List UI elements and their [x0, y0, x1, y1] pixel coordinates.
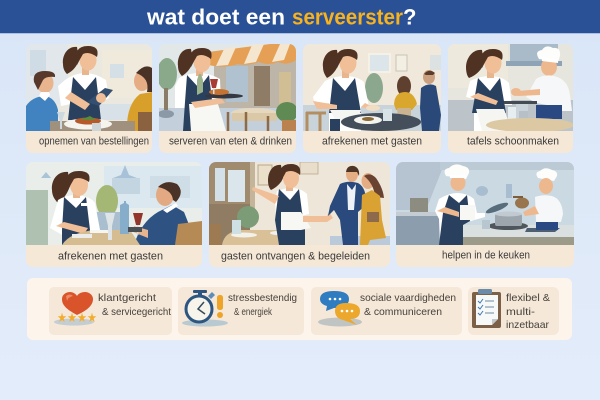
waitress: [50, 171, 100, 246]
label: afrekenen met gasten: [58, 250, 163, 262]
chair: [175, 221, 202, 245]
chef: [523, 168, 563, 230]
seated guest left: [38, 76, 54, 92]
teapot: [515, 198, 529, 208]
panel: serveren van eten & drinken: [157, 44, 298, 153]
counter: [457, 225, 574, 237]
stars: ★★★★: [57, 310, 97, 325]
chip text: sociale vaardigheden: [360, 292, 456, 304]
table: [62, 230, 140, 245]
tree left: [157, 58, 177, 90]
label: helpen in de keuken: [442, 250, 530, 262]
panel: afrekenen met gasten (top): [303, 44, 441, 153]
chip: stressbestendig: & energiek: [234, 306, 273, 318]
chip: flexibel: [468, 287, 559, 335]
label: afrekenen met gasten: [322, 136, 422, 148]
chip text: flexibel &: [506, 292, 550, 304]
pot on stove: [488, 222, 528, 230]
table with cloth: [222, 230, 279, 245]
panel: helpen in de keuken: [396, 162, 574, 267]
label: tafels schoonmaken: [467, 136, 559, 148]
label: serveren van eten & drinken: [169, 136, 292, 148]
waitress: [175, 48, 226, 131]
icon: clipboard checklist: [472, 289, 501, 328]
round table with plate and glass: [341, 113, 421, 131]
chip: stressbestendig: [178, 287, 304, 335]
label: gasten ontvangen & begeleiden: [221, 250, 370, 262]
icon: speech bubbles: [318, 291, 362, 326]
chip text: stressbestendig: [228, 292, 297, 304]
illustration: kitchen: [396, 162, 574, 245]
tools and glasses: [504, 101, 537, 104]
terrace table: [231, 108, 276, 114]
illustration: serving at terrace: [157, 44, 298, 131]
guest woman in yellow dress: [360, 173, 386, 245]
plant right: [276, 102, 296, 121]
chip text: klantgericht: [98, 292, 156, 304]
lid in hand: [485, 201, 509, 215]
guest man in suit: [328, 166, 366, 245]
plate of food: [64, 118, 112, 130]
panel: vaardigheden: [27, 278, 572, 340]
title: serveerster: [292, 4, 403, 30]
table top: [486, 118, 574, 132]
panel: tafels schoonmaken: [448, 44, 574, 153]
seated guest right: [134, 74, 148, 91]
waitress: [313, 49, 369, 131]
chip: flexibel: inzetbaar: [506, 319, 549, 331]
panel: afrekenen met gasten (bottom): [26, 162, 202, 267]
chef: [511, 46, 572, 119]
waitress: [252, 164, 333, 245]
panel: opnemen van bestellingen: [26, 44, 152, 153]
table: [50, 121, 135, 131]
illustration: welcoming guests: [209, 162, 390, 245]
chip: sociale vaardigheden: [311, 287, 462, 335]
tray with food and drinks: [205, 94, 243, 98]
illustration: waitress and chef: [448, 44, 574, 132]
title: ?: [403, 4, 416, 30]
illustration: taking payment at table: [26, 162, 202, 246]
chip: klantgericht: [49, 287, 172, 335]
waitress: [466, 49, 512, 131]
waitress: [58, 46, 113, 120]
guest: [156, 187, 173, 206]
chip: klantgericht: & servicegericht: [102, 306, 171, 318]
icon: stopwatch and exclamation: [182, 290, 228, 326]
label: opnemen van bestellingen: [39, 136, 149, 148]
title: wat doet een: [146, 4, 285, 30]
chip: sociale vaardigheden: & communiceren: [364, 306, 442, 318]
illustration: taking an order: [26, 44, 152, 131]
panel: gasten ontvangen & begeleiden: [209, 162, 390, 267]
illustration: clearing plate, guests leaving: [303, 44, 441, 133]
title: [146, 4, 416, 30]
guests: [397, 76, 411, 94]
wine glass, water bottle and phone: [105, 213, 115, 240]
waitress with chef hat: [435, 164, 485, 245]
header banner: [0, 0, 600, 34]
chip: flexibel: multi-: [506, 306, 536, 318]
awning: [206, 44, 296, 67]
